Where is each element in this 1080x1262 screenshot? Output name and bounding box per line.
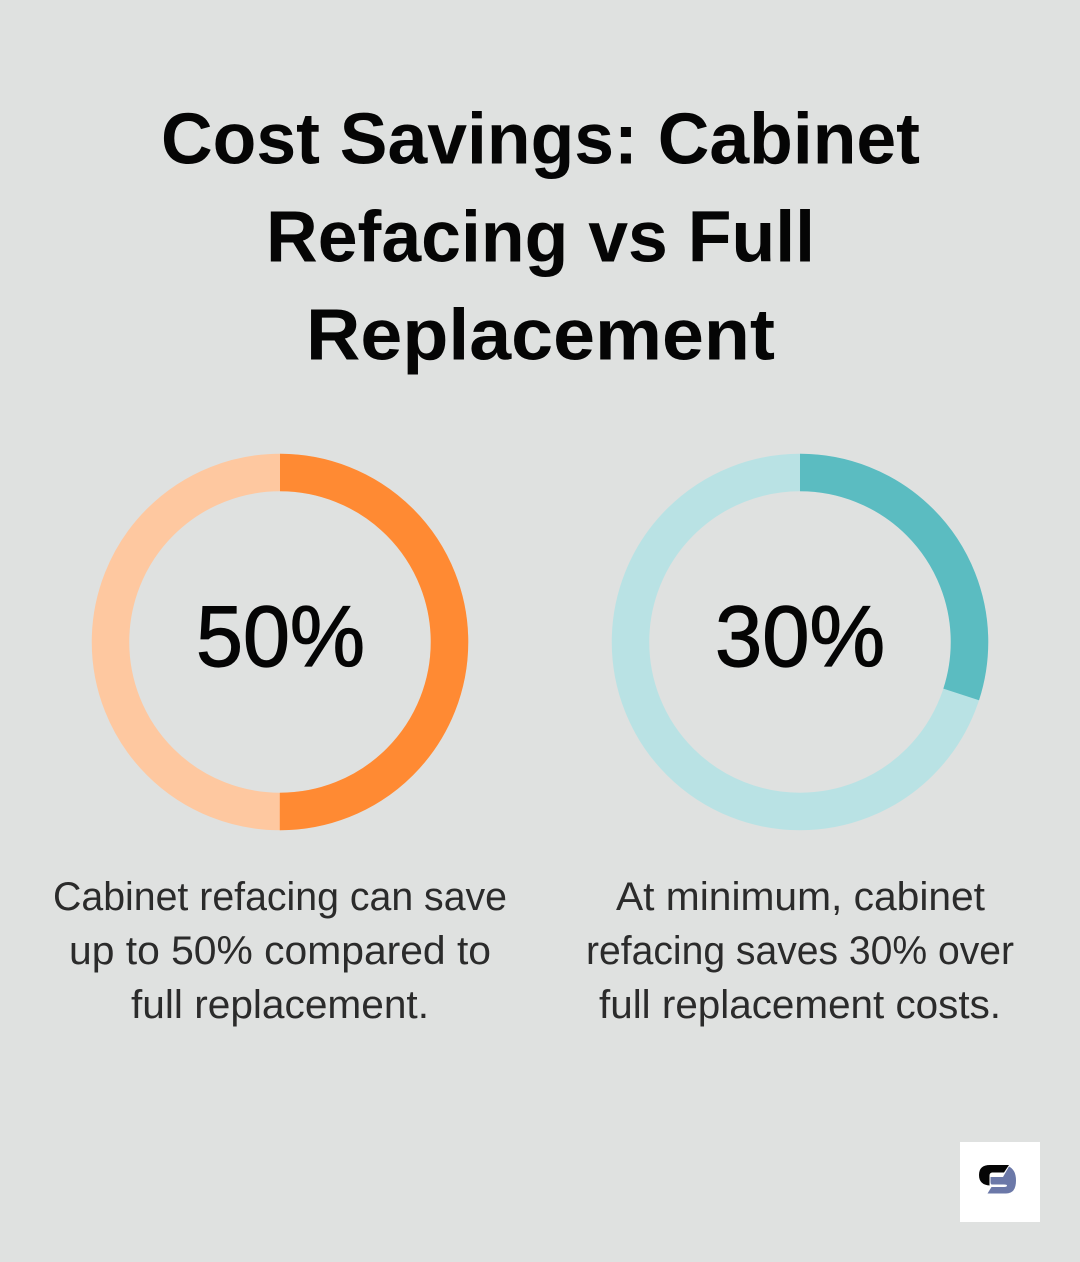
logo badge [960,1142,1040,1222]
donut chart: 50% [110,472,450,812]
description: 50%: Cabinet refacing can save [53,875,507,919]
description: 30%: At minimum, cabinet [616,875,985,919]
icon: logo mark [979,1165,1016,1194]
title: Replacement [306,296,775,376]
donut chart: 30% [630,472,970,812]
title: Cost Savings: Cabinet [161,100,920,180]
description: 30%: refacing saves 30% over [586,929,1014,973]
description: 30%: full replacement costs. [599,983,1001,1027]
description: 30% [586,875,1014,1027]
description: 50%: full replacement. [131,983,429,1027]
donut value: 50%: 50% [196,589,365,685]
title [161,100,920,376]
title: Refacing vs Full [266,198,815,278]
description: 50% [53,875,507,1027]
panel: 50% savings [53,472,507,1027]
donut value: 30%: 30% [715,589,885,685]
panel: 30% savings [586,472,1014,1027]
description: 50%: up to 50% compared to [69,929,491,973]
